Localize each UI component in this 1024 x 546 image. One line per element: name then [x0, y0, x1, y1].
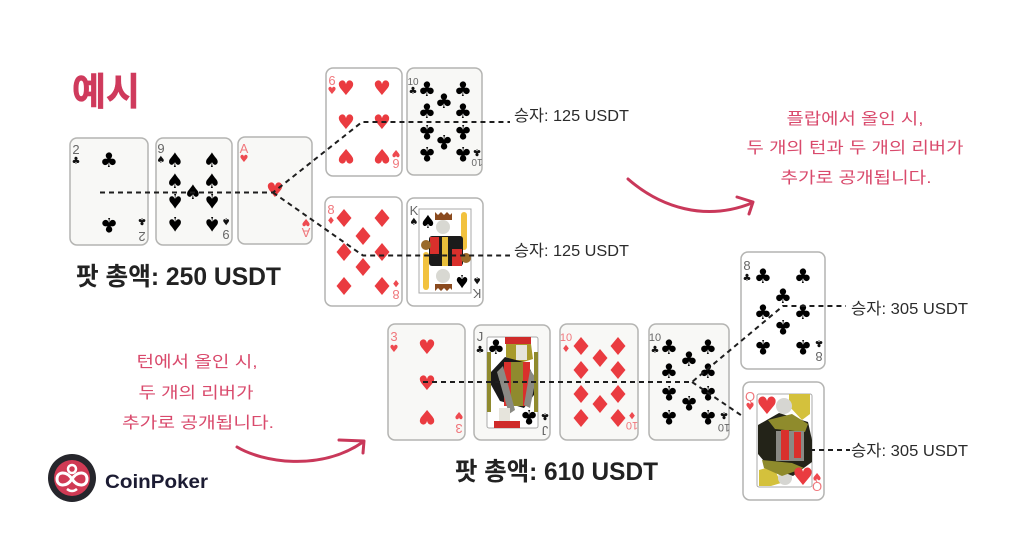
- card: 2 of clubs: ♣: [100, 148, 118, 172]
- card: king of spades: ♠: [410, 217, 418, 228]
- card: ace of hearts: A: [240, 141, 249, 156]
- card: king of spades: K: [472, 286, 481, 301]
- card: 8 of clubs: ♣: [794, 264, 812, 288]
- dashed line: turn run-outs: [423, 306, 846, 428]
- card: 10 of diamonds: ♦: [628, 409, 636, 420]
- card: jack of clubs: [474, 325, 550, 440]
- card: 10 of clubs, turn: ♣: [680, 391, 698, 415]
- card: 3 of hearts: ♥: [418, 371, 436, 395]
- card: 10 of diamonds: ♦: [562, 344, 570, 355]
- callout: turn all-in: 턴에서 올인 시,: [136, 353, 258, 371]
- card: 2 of clubs: 2: [138, 229, 146, 244]
- card: 10 of diamonds: 10: [560, 332, 572, 344]
- card: 6 of hearts: ♥: [337, 144, 355, 168]
- card: 8 of clubs: ♣: [754, 335, 772, 359]
- card: king of spades: ♠: [420, 212, 436, 233]
- card: 3 of hearts: ♥: [454, 409, 463, 420]
- card: 10 of clubs: 10: [471, 156, 483, 167]
- card: 8 of clubs: ♣: [774, 315, 792, 339]
- arrow: turn callout: [237, 440, 364, 461]
- card: 9 of spades: [156, 138, 232, 245]
- card: 10 of clubs: ♣: [473, 146, 481, 157]
- card: 3 of hearts: 3: [390, 329, 398, 344]
- card: ace of hearts: ♥: [266, 178, 284, 202]
- card: queen of hearts: ♥: [746, 402, 755, 413]
- card: jack of clubs: J: [542, 423, 548, 438]
- card: 10 of clubs: ♣: [435, 89, 453, 113]
- card: 9 of spades: 9: [222, 227, 230, 242]
- card: 6 of hearts: ♥: [337, 110, 355, 134]
- card: 8 of clubs: ♣: [754, 264, 772, 288]
- callout: flop all-in: 추가로 공개됩니다.: [780, 169, 932, 187]
- card: ace of hearts: ♥: [301, 216, 310, 227]
- card: 8 of diamonds: [325, 197, 402, 306]
- card: 6 of hearts: 6: [328, 73, 336, 88]
- winner label: bottom flop: 승자: 125 USDT: [514, 242, 629, 260]
- card: 6 of hearts: ♥: [337, 76, 355, 100]
- card: 10 of clubs, turn: ♣: [660, 381, 678, 405]
- card: 2 of clubs: ♣: [100, 213, 118, 237]
- dashed line: queen to winner label: [810, 449, 850, 451]
- card: 9 of spades: ♠: [166, 169, 184, 193]
- callout: turn all-in: [122, 353, 274, 432]
- card: 10 of clubs: ♣: [454, 99, 472, 123]
- winner label: top flop: 승자: 125 USDT: [514, 107, 629, 125]
- card: 10 of clubs, turn: ♣: [699, 359, 717, 383]
- winner label: bottom turn: 승자: 305 USDT: [851, 442, 968, 460]
- card: 10 of clubs, turn: ♣: [699, 381, 717, 405]
- winner label: top turn: 승자: 305 USDT: [851, 300, 968, 318]
- card: 10 of clubs: ♣: [418, 120, 436, 144]
- card: 6 of hearts: [326, 68, 402, 176]
- card: 8 of clubs: 8: [815, 349, 823, 364]
- card: king of spades: ♠: [454, 270, 470, 291]
- card: queen of hearts: ♥: [812, 470, 821, 481]
- pot total: flop: 팟 총액: 250 USDT: [76, 263, 281, 291]
- card: ace of hearts: [238, 137, 312, 244]
- card: 10 of clubs, turn: ♣: [680, 347, 698, 371]
- card: 8 of clubs: ♣: [743, 273, 751, 284]
- card: 9 of spades: ♠: [203, 189, 221, 213]
- card: 10 of clubs: ♣: [409, 86, 417, 97]
- card: 6 of hearts: ♥: [373, 144, 391, 168]
- card: 10 of clubs: ♣: [435, 130, 453, 154]
- card: 10 of clubs, turn: ♣: [720, 409, 728, 420]
- pot total: turn: 팟 총액: 610 USDT: [455, 458, 658, 486]
- card: 2 of clubs: [70, 138, 148, 245]
- card: jack of clubs: ♣: [541, 410, 549, 421]
- card: 8 of diamonds: 8: [392, 287, 400, 302]
- card: 9 of spades: ♠: [166, 148, 184, 172]
- card: 10 of clubs: ♣: [454, 120, 472, 144]
- card: queen of hearts: ♥: [792, 463, 814, 491]
- card: queen of hearts: Q: [745, 389, 755, 404]
- callout: turn all-in: 추가로 공개됩니다.: [122, 414, 274, 432]
- card: 9 of spades: ♠: [157, 155, 165, 166]
- card: 3 of hearts: ♥: [390, 344, 399, 355]
- callout: flop all-in: 플랍에서 올인 시,: [786, 110, 924, 128]
- card: queen of hearts: Q: [812, 479, 822, 494]
- card: king of spades: ♠: [473, 274, 481, 285]
- card: 10 of clubs: ♣: [418, 99, 436, 123]
- card: 8 of clubs: ♣: [774, 284, 792, 308]
- card: 3 of hearts: ♥: [418, 335, 436, 359]
- callout: turn all-in: 두 개의 리버가: [138, 384, 254, 402]
- card: 10 of clubs, turn: ♣: [651, 345, 659, 356]
- card: 3 of hearts: ♥: [418, 405, 436, 429]
- card: 10 of clubs: 10: [407, 77, 419, 88]
- card: 9 of spades: ♠: [203, 169, 221, 193]
- card: 2 of clubs: ♣: [72, 156, 80, 167]
- card: 8 of clubs: ♣: [815, 337, 823, 348]
- card: 8 of clubs: 8: [743, 258, 751, 273]
- card: 9 of spades: ♠: [166, 189, 184, 213]
- card: 8 of clubs: ♣: [794, 300, 812, 324]
- card: 9 of spades: ♠: [203, 212, 221, 236]
- card: jack of clubs: ♣: [476, 345, 484, 356]
- arrow: flop callout: [628, 179, 753, 214]
- card: 9 of spades: ♠: [222, 215, 230, 226]
- card: 10 of clubs: ♣: [454, 142, 472, 166]
- card: 10 of clubs: ♣: [418, 142, 436, 166]
- card: 10 of diamonds: 10: [626, 419, 638, 431]
- card: 6 of hearts: ♥: [373, 76, 391, 100]
- card: 10 of diamonds: [560, 324, 638, 440]
- card: 10 of clubs, turn: 10: [718, 421, 730, 433]
- card: 6 of hearts: ♥: [373, 110, 391, 134]
- card: 3 of hearts: 3: [455, 421, 463, 436]
- card: 10 of clubs: ♣: [418, 77, 436, 101]
- card: 8 of clubs: ♣: [754, 300, 772, 324]
- dashed line: flop run-outs: [100, 122, 510, 256]
- card: 2 of clubs: 2: [72, 142, 80, 157]
- card: jack of clubs: ♣: [487, 335, 505, 359]
- card: 8 of clubs: [741, 252, 825, 369]
- card: 6 of hearts: ♥: [391, 147, 400, 158]
- card: jack of clubs: J: [477, 329, 483, 344]
- card: jack of clubs: ♣: [520, 405, 538, 429]
- card: 3 of hearts: [388, 324, 465, 440]
- card: 6 of hearts: ♥: [328, 86, 337, 97]
- card: 10 of clubs, turn: ♣: [660, 359, 678, 383]
- card: 10 of clubs, turn: ♣: [660, 335, 678, 359]
- logo: CoinPoker: CoinPoker: [105, 472, 209, 493]
- card: 8 of clubs: ♣: [794, 335, 812, 359]
- card: queen of hearts: ♥: [756, 392, 778, 420]
- card: 10 of clubs, turn: [649, 324, 730, 440]
- card: king of spades: K: [410, 203, 419, 218]
- card: 10 of clubs, turn: 10: [649, 332, 661, 344]
- card: ace of hearts: A: [301, 225, 310, 240]
- card: 10 of clubs: ♣: [454, 77, 472, 101]
- card: 9 of spades: ♠: [184, 180, 202, 204]
- callout: flop all-in: [746, 110, 964, 187]
- card: ace of hearts: ♥: [240, 154, 249, 165]
- card: 9 of spades: ♠: [203, 148, 221, 172]
- card: 2 of clubs: ♣: [138, 215, 146, 226]
- card: 10 of clubs, turn: ♣: [699, 335, 717, 359]
- card: 10 of clubs, turn: ♣: [660, 405, 678, 429]
- title: 예시: [72, 72, 140, 114]
- logo: CoinPoker: [48, 454, 209, 502]
- card: 10 of clubs, turn: ♣: [699, 405, 717, 429]
- callout: flop all-in: 두 개의 턴과 두 개의 리버가: [746, 139, 964, 157]
- card: queen of hearts: [743, 382, 824, 500]
- card: 8 of diamonds: ♦: [392, 277, 400, 288]
- card: 6 of hearts: 6: [392, 156, 400, 171]
- card: king of spades: [407, 198, 483, 306]
- card: 10 of clubs: [407, 68, 483, 175]
- card: 8 of diamonds: 8: [327, 202, 335, 217]
- card: 9 of spades: ♠: [166, 212, 184, 236]
- card: 9 of spades: 9: [157, 141, 165, 156]
- card: 8 of diamonds: ♦: [327, 216, 335, 227]
